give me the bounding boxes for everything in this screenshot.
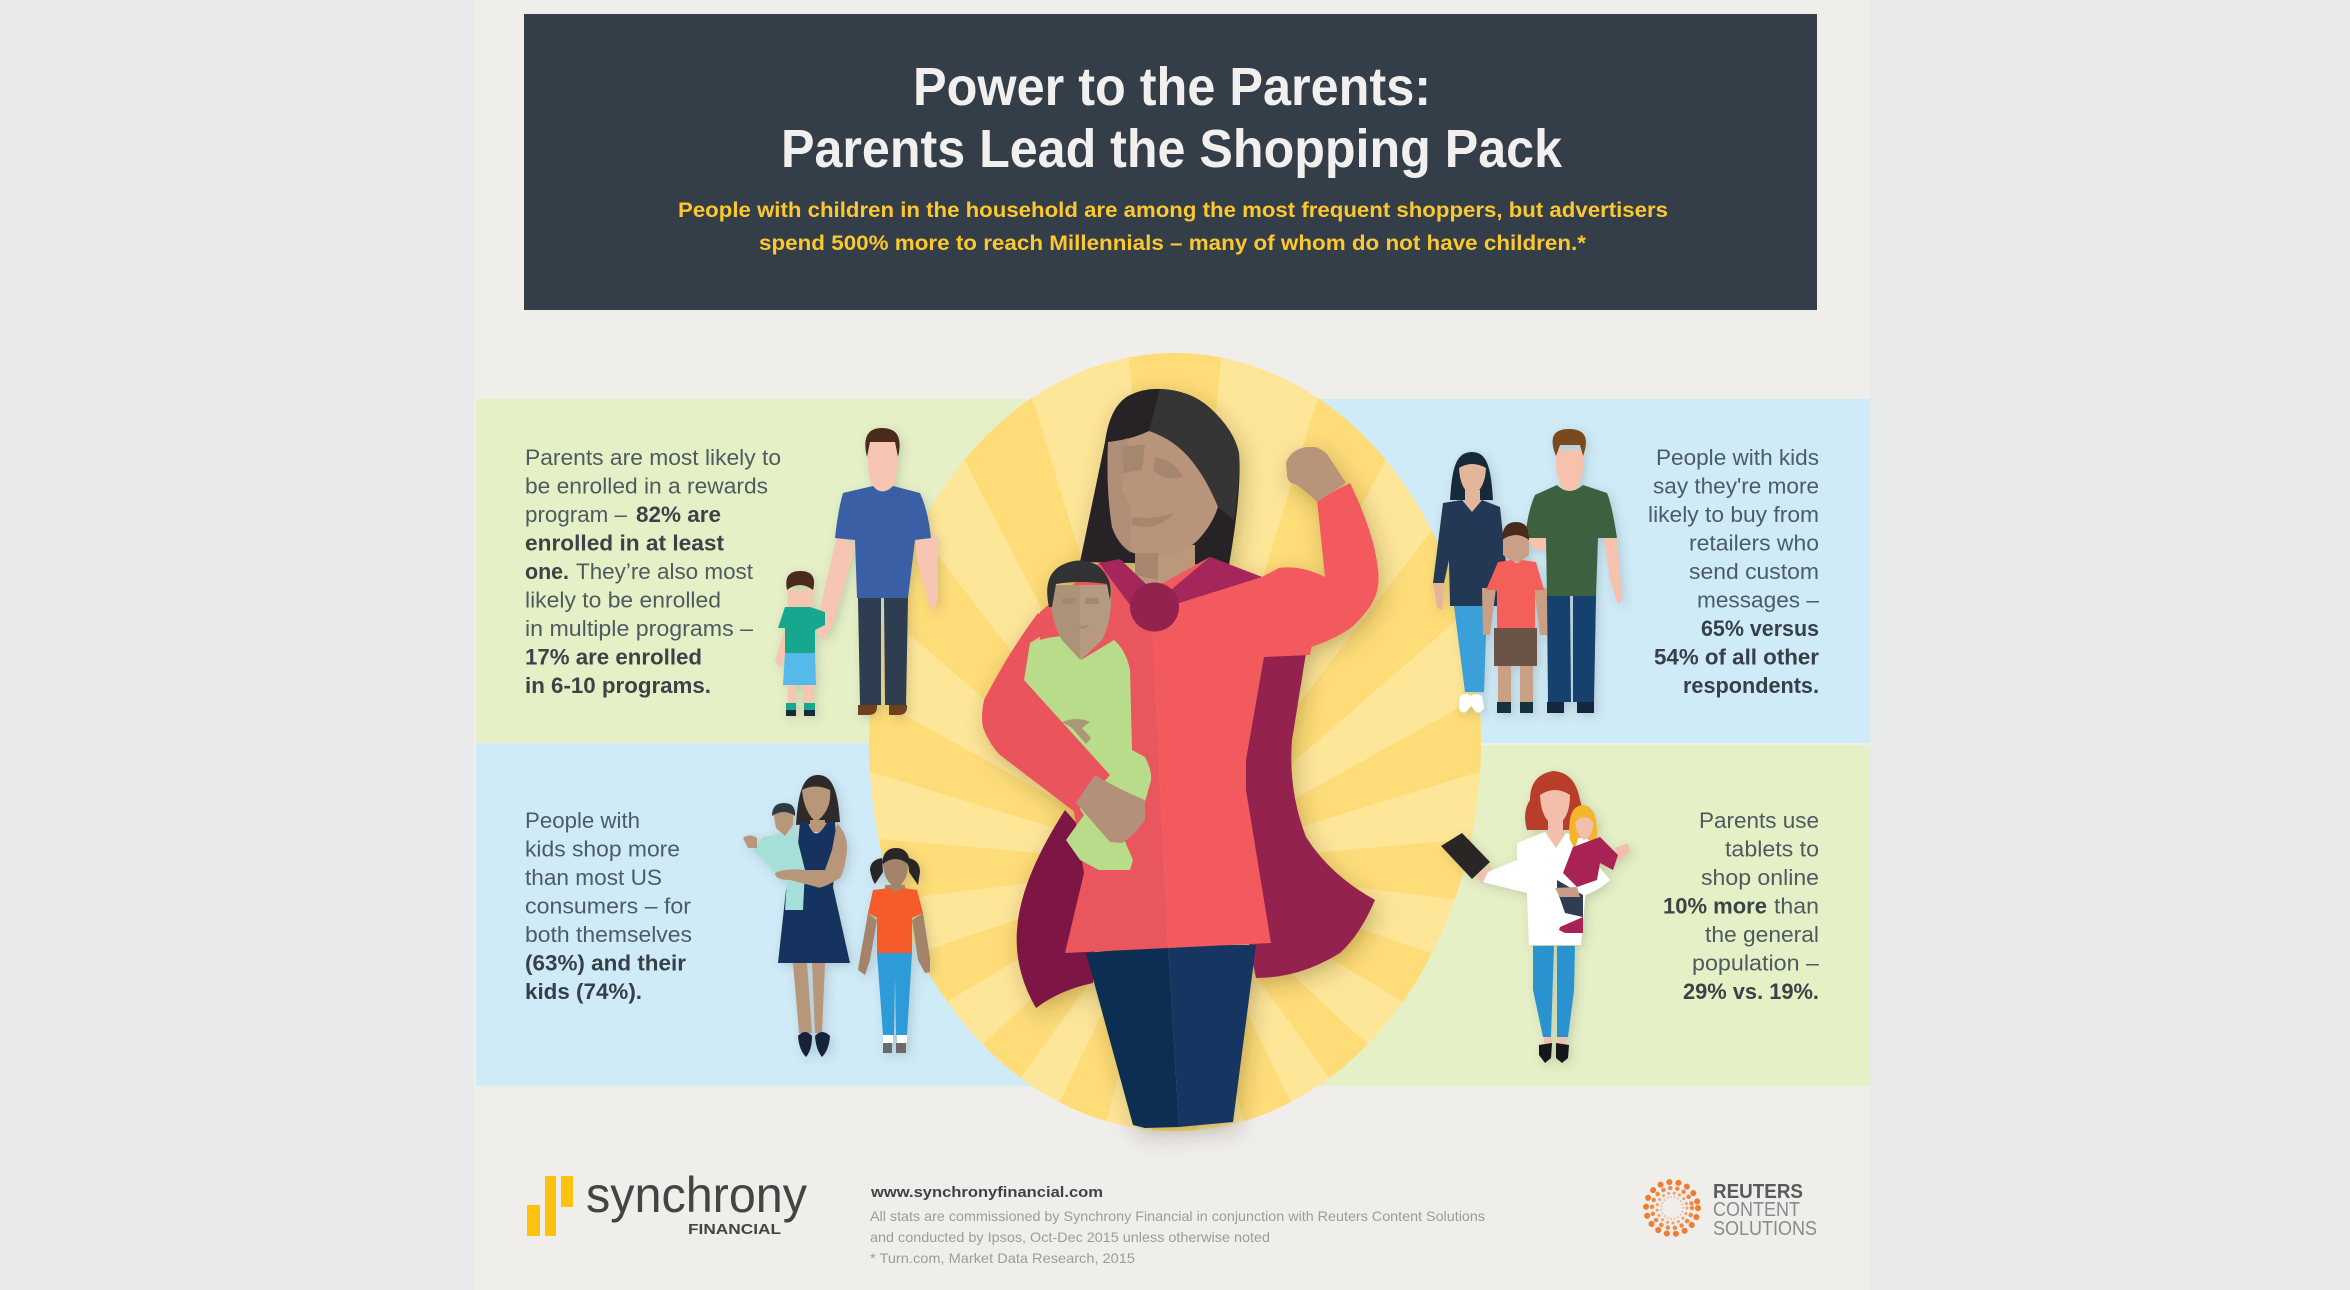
neck xyxy=(1135,545,1195,600)
face xyxy=(1108,431,1218,580)
text: tablets: population – xyxy=(1692,950,1820,976)
text: custom messages: People with kids xyxy=(1656,445,1819,470)
text: kids and shopping: than most US xyxy=(525,865,662,890)
footer: source notes: www.synchronyfinancial.com xyxy=(870,1184,1103,1201)
figures: mother with tablet and daughter xyxy=(1441,771,1630,1063)
trousers xyxy=(1086,945,1256,1128)
text: custom messages: respondents. xyxy=(1683,673,1819,698)
footer: Reuters logo: REUTERS xyxy=(1713,1181,1803,1203)
page background xyxy=(474,0,1870,1290)
text: tablets: the general xyxy=(1705,922,1819,947)
back hair xyxy=(1080,389,1240,565)
sunburst background xyxy=(869,353,1481,1131)
text: kids and shopping: both themselves xyxy=(525,922,692,947)
text: tablets: tablets to xyxy=(1725,836,1819,862)
text: rewards programs: program – xyxy=(525,502,628,527)
text: tablets: Parents use xyxy=(1699,808,1819,833)
footer: source notes xyxy=(870,1184,1485,1266)
child head xyxy=(1047,560,1111,660)
text: custom messages: say they're more xyxy=(1653,474,1819,498)
footer: Synchrony logo xyxy=(527,1167,807,1238)
text: rewards programs: in 6-10 programs. xyxy=(525,673,711,698)
text: tablets: 10% more xyxy=(1663,894,1767,918)
text: rewards programs: Parents are most likely to xyxy=(525,445,781,470)
main figure: super parent holding child xyxy=(982,389,1379,1128)
collar xyxy=(1099,557,1262,628)
text: kids and shopping: People with xyxy=(525,808,640,833)
text: custom messages: likely to buy from xyxy=(1648,502,1819,527)
figures: family of three xyxy=(1433,429,1622,713)
text: rewards programs xyxy=(525,445,781,698)
cape xyxy=(1017,650,1375,1008)
figures: father and son xyxy=(775,428,938,716)
text: rewards programs: be enrolled in a rewards xyxy=(525,474,768,498)
panel: bottom right green xyxy=(1175,745,1870,1086)
footer: Reuters logo xyxy=(1646,1181,1817,1240)
text: custom messages: send custom xyxy=(1689,559,1819,584)
text: tablets xyxy=(1663,808,1820,1004)
text: kids and shopping xyxy=(525,808,692,1004)
text: kids and shopping: kids shop more xyxy=(525,836,680,862)
brooch xyxy=(1130,582,1179,632)
hand holding child xyxy=(1076,775,1145,843)
text: tablets: than xyxy=(1774,894,1819,918)
panel: top left green xyxy=(476,399,1176,743)
footer: Synchrony logo: FINANCIAL xyxy=(688,1221,781,1238)
panel: bottom left blue xyxy=(476,743,1176,1086)
text: custom messages: retailers who xyxy=(1689,530,1819,556)
raised arm xyxy=(1262,483,1379,657)
footer: Reuters logo: SOLUTIONS xyxy=(1713,1218,1817,1240)
subtitle xyxy=(678,199,1668,255)
infographic canvas xyxy=(476,14,1870,1265)
panel: top right blue xyxy=(1175,399,1870,743)
title: Power to the Parents: xyxy=(913,57,1431,117)
torso xyxy=(1040,557,1325,953)
text: rewards programs: in multiple programs – xyxy=(525,616,754,641)
text: rewards programs: likely to be enrolled xyxy=(525,588,721,612)
child body xyxy=(1022,635,1151,870)
subtitle: People with children in the household are among the most frequent shoppers, but advertisers xyxy=(678,199,1668,222)
text: rewards programs: They’re also most xyxy=(576,559,753,584)
text: kids and shopping: (63%) and their xyxy=(525,950,686,976)
raised fist xyxy=(1286,447,1346,502)
text: tablets: shop online xyxy=(1701,865,1819,890)
text: custom messages: 54% of all other xyxy=(1654,644,1819,670)
text: custom messages: 65% versus xyxy=(1701,616,1819,641)
title: Parents Lead the Shopping Pack xyxy=(781,119,1563,179)
footer: Reuters logo: CONTENT xyxy=(1713,1199,1800,1221)
supporting arm xyxy=(982,613,1110,813)
footer: source notes: * Turn.com, Market Data Research, 2015 xyxy=(870,1250,1135,1266)
footer: source notes: and conducted by Ipsos, Oct-Dec 2015 unless otherwise noted xyxy=(870,1229,1270,1245)
footer: Synchrony logo: synchrony xyxy=(586,1167,807,1223)
subtitle: spend 500% more to reach Millennials – many of whom do not have children.* xyxy=(759,232,1587,255)
text: kids and shopping: consumers – for xyxy=(525,894,691,918)
text: rewards programs: enrolled in at least xyxy=(525,530,725,556)
text: tablets: 29% vs. 19%. xyxy=(1683,979,1819,1004)
text: kids and shopping: kids (74%). xyxy=(525,979,642,1004)
title xyxy=(781,57,1563,179)
text: custom messages: messages – xyxy=(1697,588,1820,612)
footer: source notes: All stats are commissioned by Synchrony Financial in conjunction with Reuters Content Solutions xyxy=(870,1208,1485,1224)
figures: mother with baby and daughter xyxy=(743,775,930,1057)
header banner xyxy=(524,14,1817,310)
text: rewards programs: 17% are enrolled xyxy=(525,644,702,670)
text: rewards programs: one. xyxy=(525,559,569,584)
text: rewards programs: 82% are xyxy=(636,502,721,527)
text: custom messages xyxy=(1648,445,1820,698)
